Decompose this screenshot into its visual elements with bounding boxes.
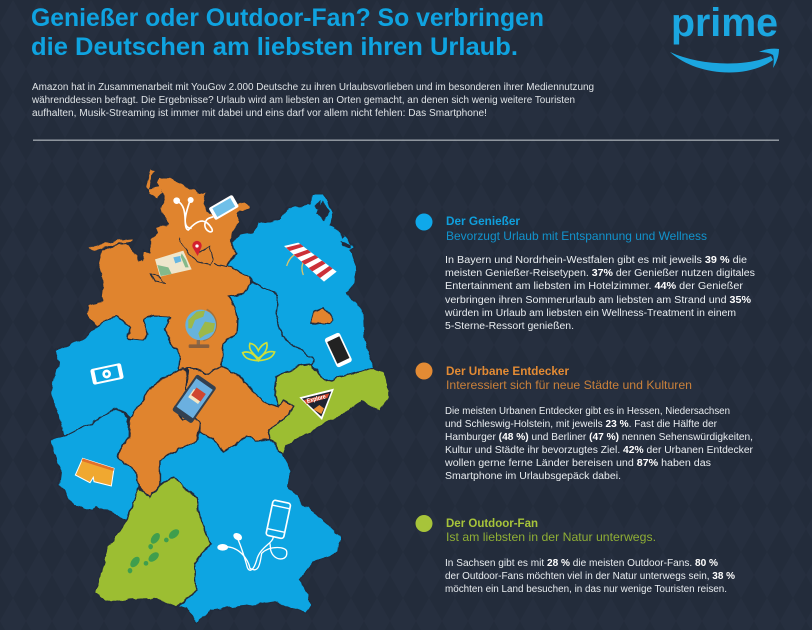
map regions [50, 169, 388, 623]
region: Rheinland-Pfalz and Saarland [52, 408, 138, 520]
icon: explore badge [299, 389, 334, 420]
region: Sachsen [268, 365, 388, 455]
body text [444, 255, 755, 332]
title [31, 4, 544, 61]
icon: footprints [128, 527, 181, 573]
icon: smartphone [324, 332, 353, 368]
coast: bays and lakes [137, 200, 352, 262]
intro text: aufhalten, Musik-Streaming ist immer mit dabei und eins darf vor allem nicht fehlen: Das Smartphone! [32, 108, 487, 119]
region: Bayern [160, 432, 341, 623]
logo: prime [670, 1, 779, 72]
icon: tablet with photos [172, 374, 217, 424]
icon: beach chair [284, 243, 337, 282]
heading: Der Genießer: Der Genießer [446, 214, 520, 228]
borders: Hamburg and Bremen [150, 238, 227, 283]
subheading: Interessiert sich für neue Städte und Kulturen [446, 378, 692, 392]
body text: Kultur und Städte ihr bevorzugtes Ziel. 42% der Urbanen Entdecker [445, 445, 754, 456]
body text: meisten Genießer-Reisetypen. 37% der Genießer nutzen digitales [445, 268, 755, 279]
subheading: Bevorzugt Urlaub mit Entspannung und Wellness [446, 229, 707, 243]
region: Mecklenburg-Vorpommern and Brandenburg [227, 193, 373, 382]
section: Der Genießer [416, 214, 755, 332]
subheading: Ist am liebsten in der Natur unterwegs. [446, 530, 656, 544]
section: Der Urbane Entdecker [416, 362, 754, 482]
body text: verbringen ihren Sommerurlaub am liebsten am Strand und 35% [445, 295, 751, 306]
marker: orange dot [416, 362, 432, 380]
heading: Der Outdoor-Fan: Der Outdoor-Fan [446, 516, 538, 530]
body text: Die meisten Urbanen Entdecker gibt es in Hessen, Niedersachsen [445, 406, 730, 417]
icon: video phone [90, 363, 124, 385]
region: Hessen [117, 368, 200, 497]
body text: möchten ein Land besuchen, in das nur wenige Touristen reisen. [445, 584, 727, 595]
icon: earphones and phone [173, 195, 239, 232]
intro text: währenddessen befragt. Die Ergebnisse? Urlaub wird am liebsten an Orten gemacht, an denen sich wenig weitere Touristen [31, 95, 575, 106]
icon: location pin [192, 241, 202, 256]
body text: würden im Urlaub am liebsten ein Wellness-Treatment in einem [444, 308, 736, 319]
region: Sachsen-Anhalt [222, 282, 314, 407]
region: Thüringen [175, 367, 293, 452]
region: Nordrhein-Westfalen [50, 316, 180, 437]
icon: swim shorts [75, 458, 114, 486]
body text: Entertainment am liebsten im Hotelzimmer. 44% der Genießer [445, 281, 744, 292]
icon: phone with earphones [218, 500, 291, 570]
body text: In Sachsen gibt es mit 28 % die meisten Outdoor-Fans. 80 % [445, 558, 718, 569]
body text: und Schleswig-Holstein, mit jeweils 23 %. Fast die Hälfte der [445, 419, 718, 430]
title: die Deutschen am liebsten ihren Urlaub. [31, 33, 518, 61]
marker: blue dot [416, 214, 432, 230]
logo: prime: prime [671, 1, 778, 45]
intro text: Amazon hat in Zusammenarbeit mit YouGov 2.000 Deutsche zu ihren Urlaubsvorlieben und im besonderen ihrer Mediennutzung [32, 82, 594, 93]
intro text [31, 82, 594, 119]
body text [445, 558, 735, 595]
icon: explore badge: Explore [306, 393, 327, 405]
body text [444, 406, 754, 482]
heading: Der Urbane Entdecker: Der Urbane Entdecker [446, 364, 569, 378]
region: Berlin [311, 307, 333, 324]
region: Niedersachsen and Schleswig-Holstein [87, 169, 252, 373]
icon: lotus flower [243, 343, 275, 361]
body text: Smartphone im Urlaubsgepäck dabei. [445, 471, 621, 482]
icon: globe [185, 309, 216, 348]
title: Genießer oder Outdoor-Fan? So verbringen [31, 4, 544, 32]
marker: green dot [416, 515, 432, 532]
region: Baden-Württemberg [95, 477, 210, 607]
icon: map [155, 251, 192, 277]
body text: der Outdoor-Fans möchten viel in der Natur unterwegs sein, 38 % [445, 571, 735, 582]
map of Germany [50, 169, 388, 623]
body text: In Bayern und Nordrhein-Westfalen gibt es mit jeweils 39 % die [445, 255, 747, 266]
section: Der Outdoor-Fan [416, 515, 735, 595]
body text: wollen gerne ferne Länder bereisen und 87% haben das [444, 458, 711, 469]
body text: Hamburger (48 %) und Berliner (47 %) nennen Sehenswürdigkeiten, [445, 432, 753, 443]
body text: 5-Sterne-Ressort genießen. [445, 321, 574, 332]
